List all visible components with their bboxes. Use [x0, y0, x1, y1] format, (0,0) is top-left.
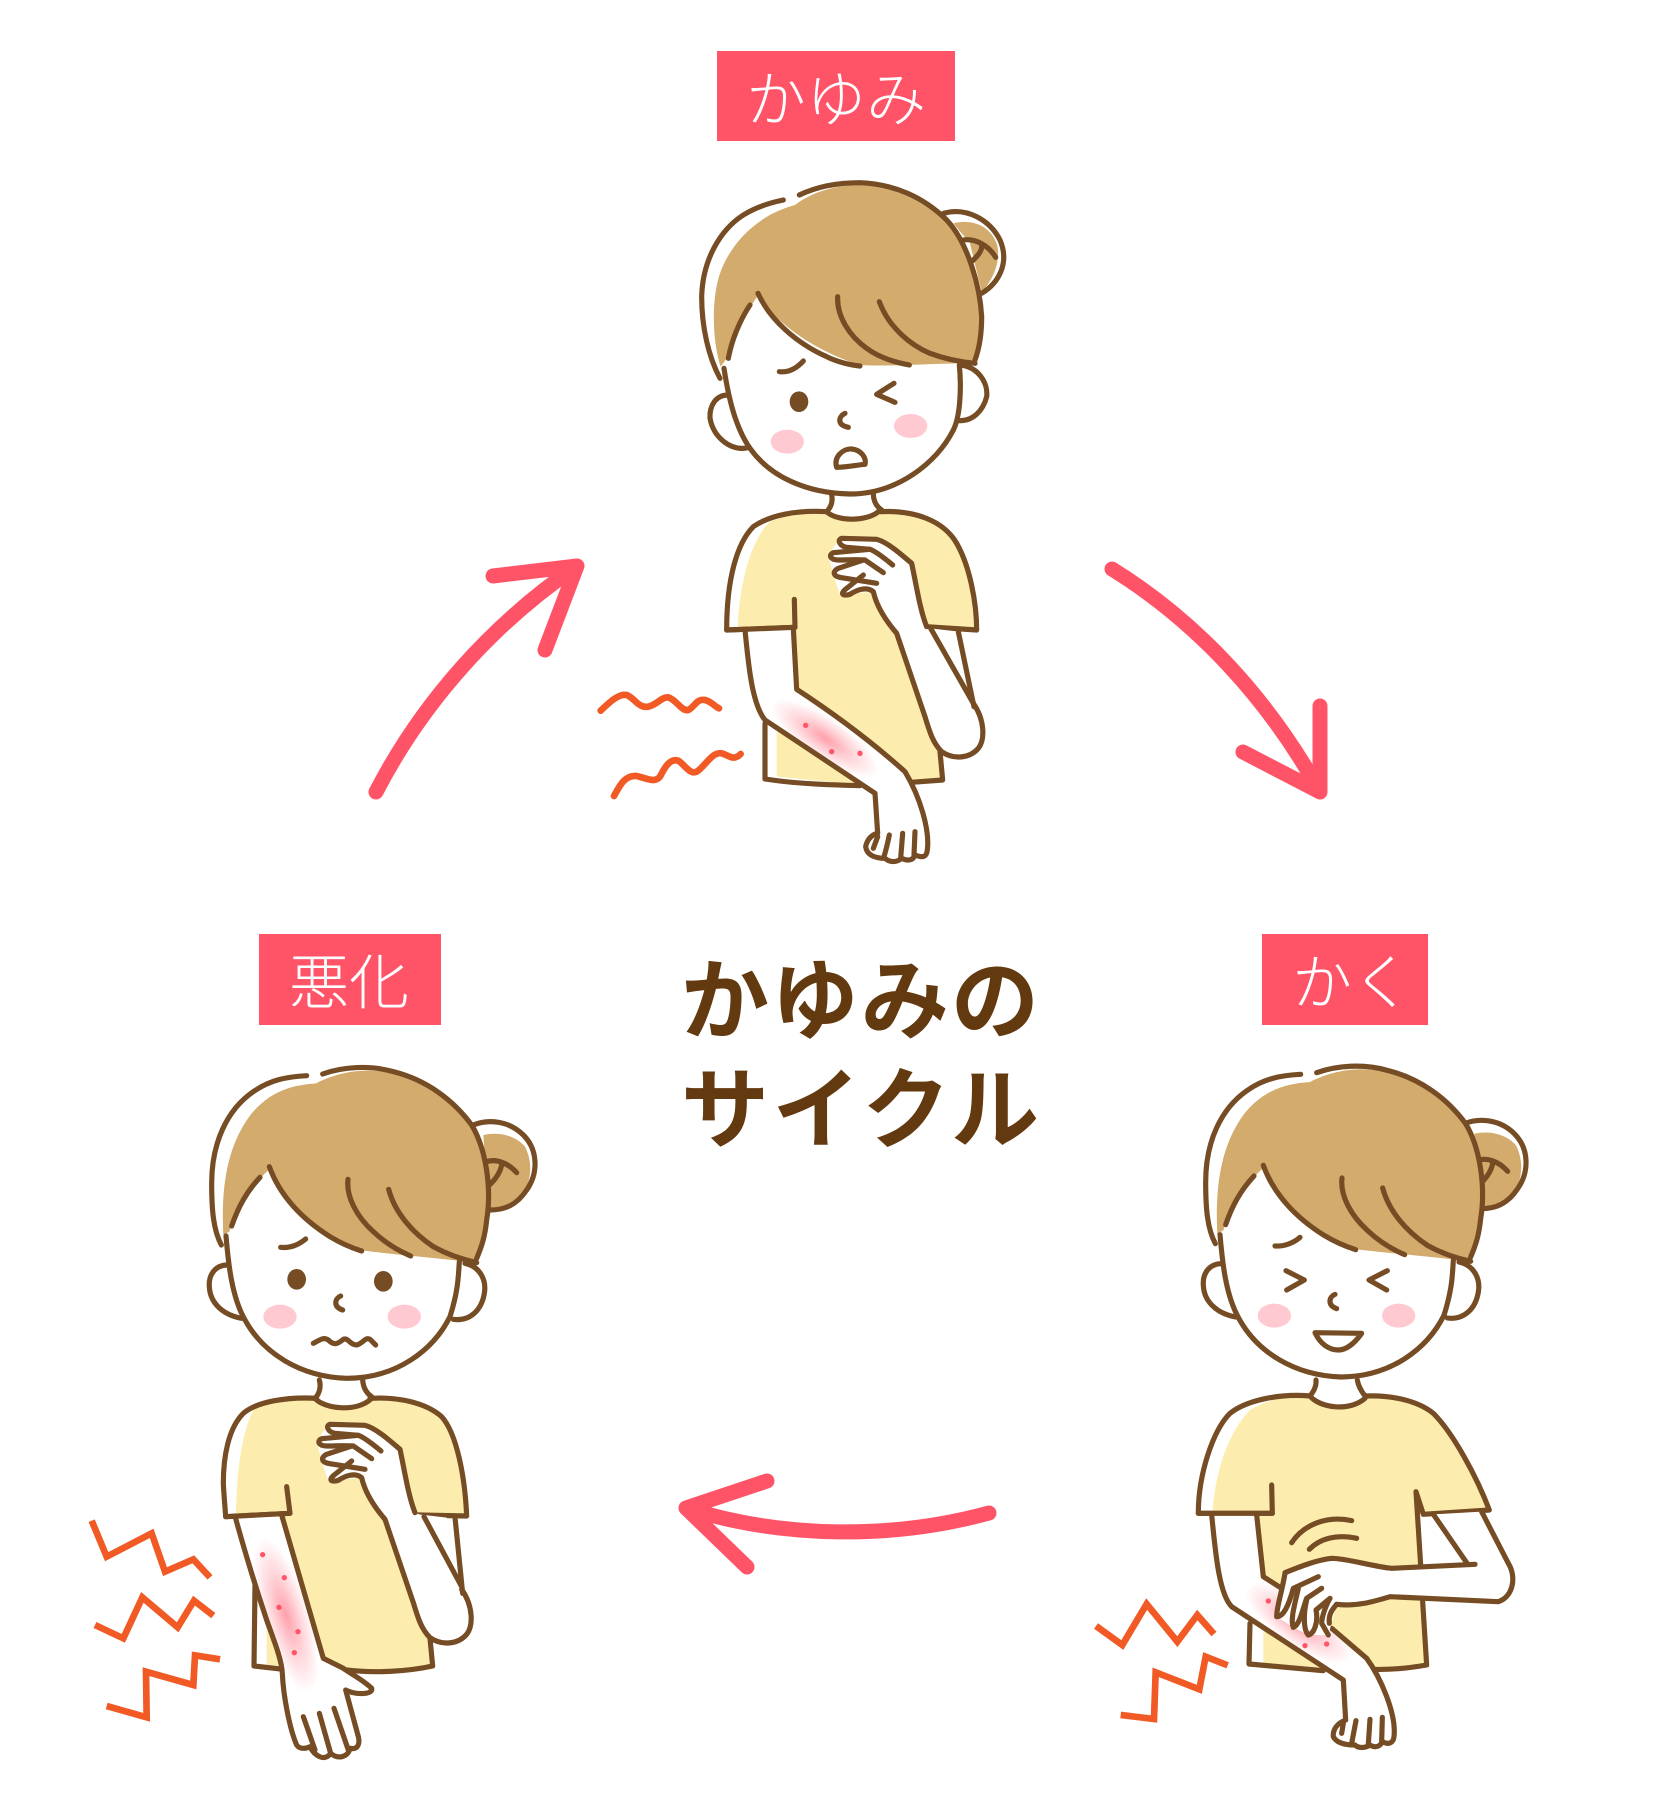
label: かゆみ: かゆみ — [746, 67, 926, 134]
title: かゆみの — [681, 952, 1039, 1051]
arrow: worsening to itch — [376, 566, 577, 792]
title — [681, 952, 1039, 1160]
title: サイクル — [681, 1061, 1039, 1160]
jagged lines: pain — [1096, 1604, 1228, 1719]
label: かゆみ — [717, 51, 955, 141]
arrow: itch to scratch — [1112, 569, 1320, 792]
jagged lines: worse pain — [92, 1521, 220, 1717]
label: かく — [1262, 934, 1428, 1025]
figure: itching person — [601, 183, 1004, 862]
arrow: scratch to worsening — [686, 1481, 989, 1567]
body: itching — [727, 493, 983, 862]
head: itching, winking — [702, 183, 1004, 494]
head: scratching, eyes squeezed — [1203, 1066, 1526, 1377]
body: scratching — [1198, 1380, 1513, 1747]
label: かく: かく — [1292, 950, 1412, 1017]
label: 悪化: 悪化 — [289, 950, 409, 1017]
figure: scratching person — [1096, 1066, 1526, 1747]
head: worsening, wavy mouth — [209, 1067, 535, 1378]
figure: worsening person — [92, 1067, 535, 1758]
body: worsening — [223, 1380, 471, 1758]
squiggles: itch — [601, 695, 741, 796]
label: 悪化 — [259, 934, 441, 1025]
